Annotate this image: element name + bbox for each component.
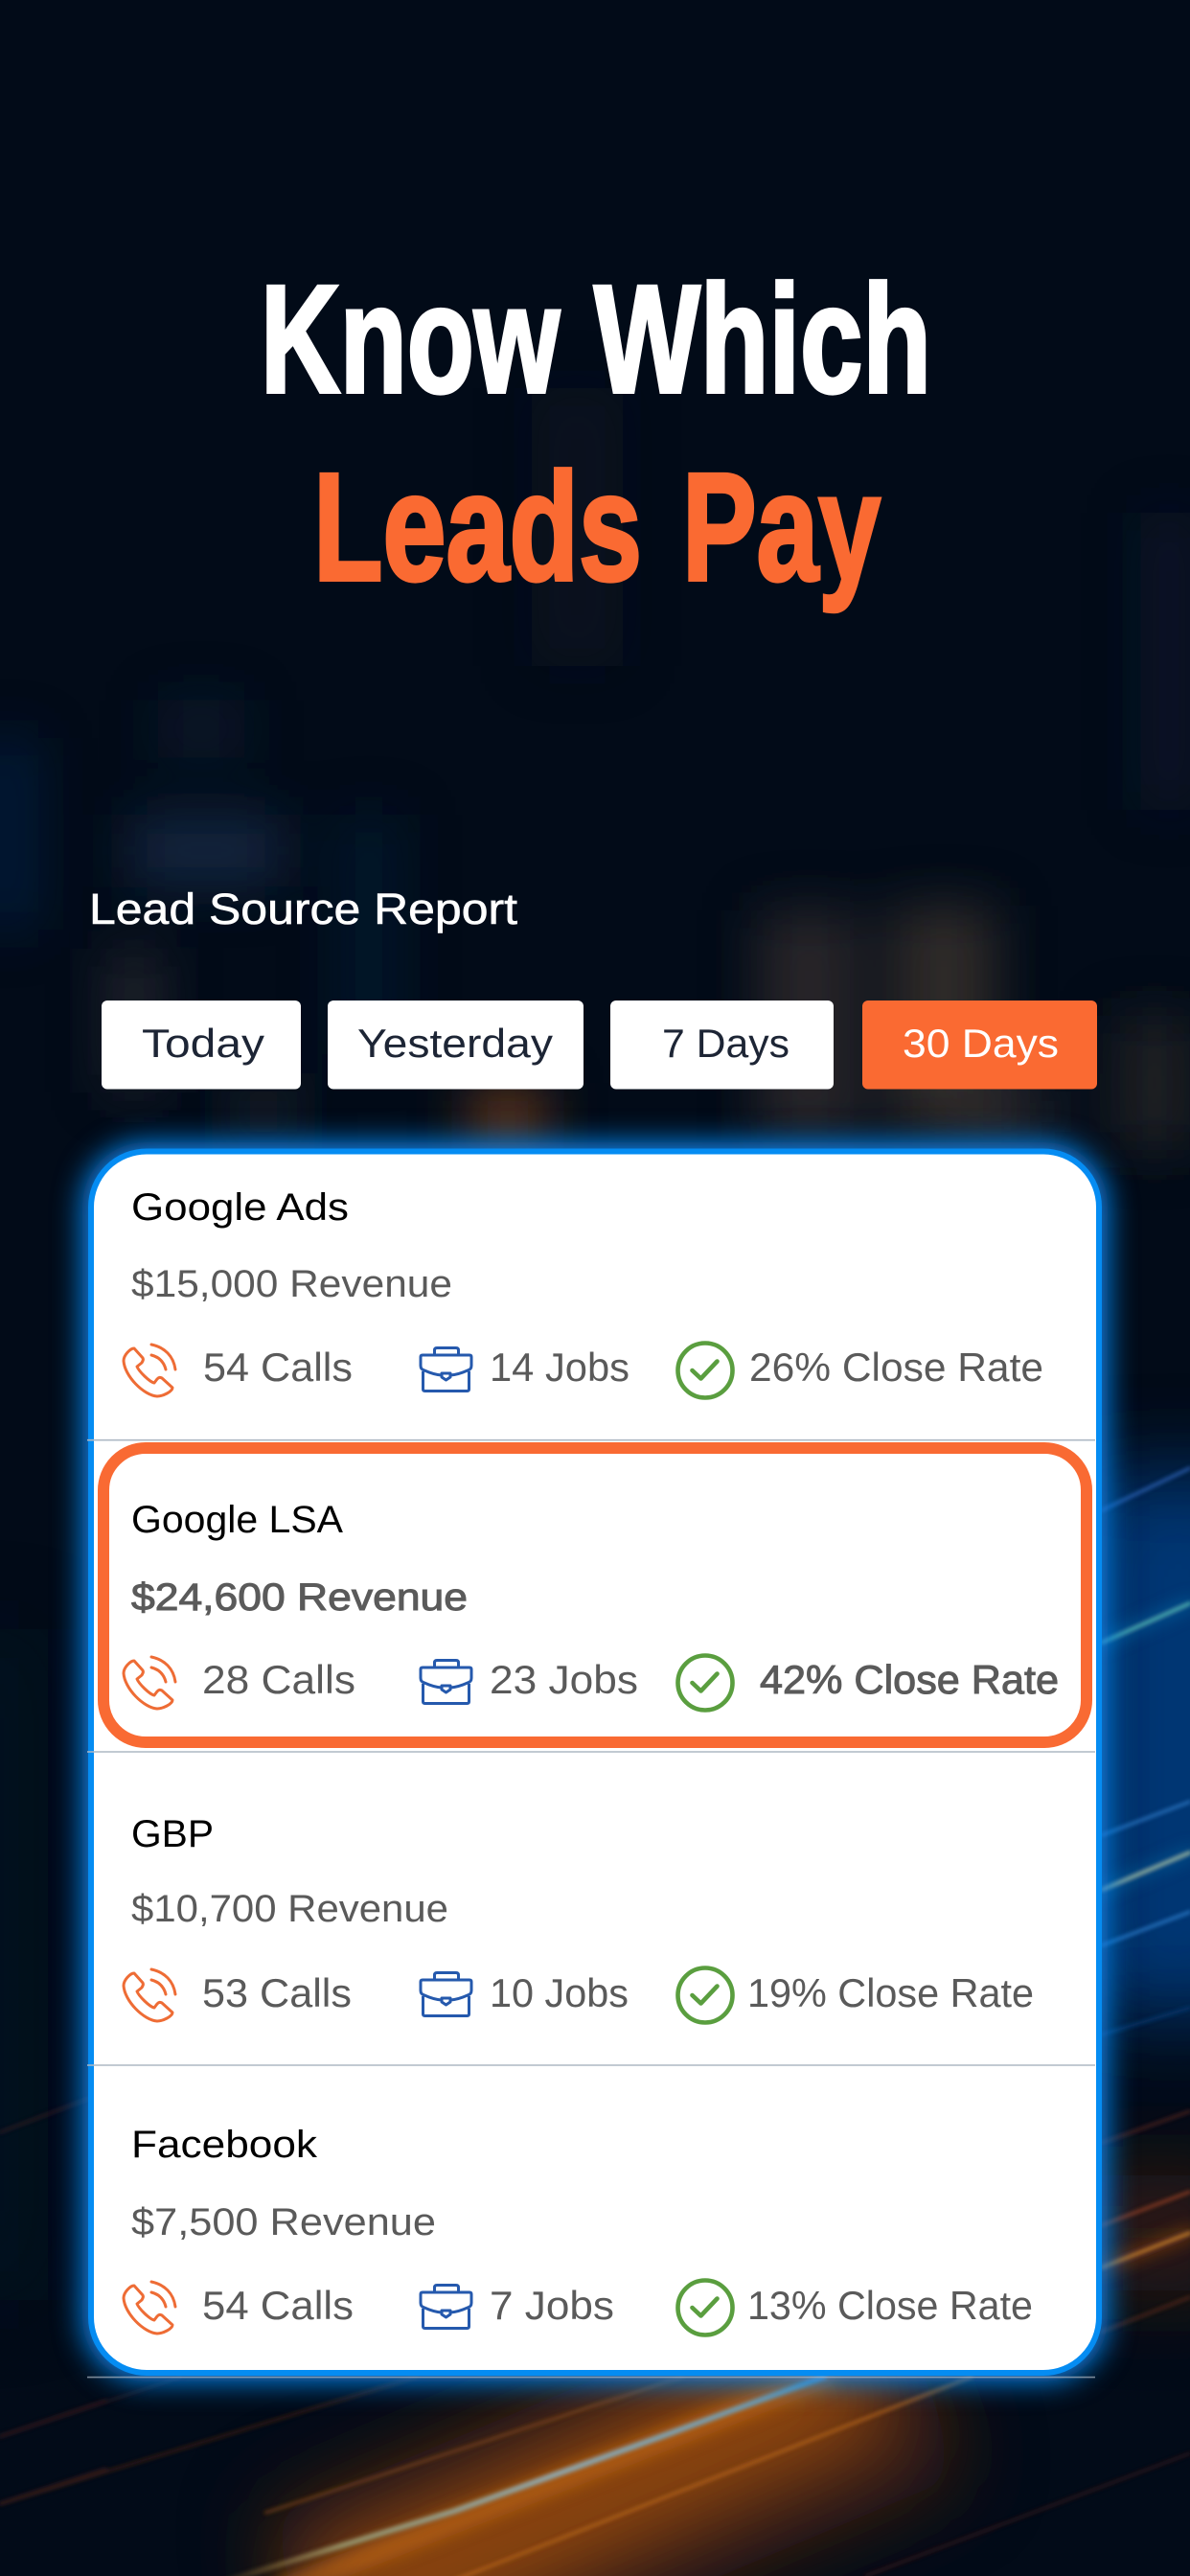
panel: glow behind report card [82, 1142, 1108, 2381]
row: GBP: 19% Close Rate [747, 1970, 1034, 2015]
row: Google Ads: 54 Calls [203, 1345, 353, 1390]
icon: phone [124, 1969, 175, 2021]
tab: 30 Days (active): 30 Days [903, 1021, 1059, 1066]
row: Facebook: 7 Jobs [490, 2283, 614, 2328]
title: Know [261, 253, 560, 425]
icon: briefcase [421, 2285, 471, 2329]
row: Facebook: Facebook [131, 2124, 318, 2166]
row: Facebook: 54 Calls [202, 2283, 354, 2328]
row: Facebook [124, 2124, 1033, 2334]
icon: check circle [678, 2281, 732, 2334]
row: Google LSA [124, 1499, 1059, 1710]
row: Google LSA: $24,600 Revenue [131, 1576, 468, 1619]
row: GBP [124, 1813, 1034, 2022]
title: Which [594, 253, 931, 425]
row: Facebook: 13% Close Rate [747, 2283, 1033, 2328]
tab: 30 Days (active) [862, 1000, 1097, 1089]
title: Pay [682, 441, 881, 612]
tab: Today: Today [142, 1021, 264, 1066]
icon: phone [124, 2282, 175, 2334]
title: Leads [313, 441, 642, 612]
row: Google Ads: 14 Jobs [490, 1345, 629, 1390]
row: Google LSA: Google LSA [131, 1499, 343, 1541]
icon: briefcase [421, 1972, 471, 2016]
row: Google LSA: 23 Jobs [490, 1657, 638, 1702]
row: Facebook: $7,500 Revenue [131, 2201, 436, 2243]
icon: briefcase [421, 1660, 471, 1704]
icon: phone [124, 1345, 175, 1396]
icon: check circle [678, 1344, 732, 1397]
row: Google Ads: Google Ads [131, 1186, 349, 1229]
tab: Today [102, 1000, 301, 1089]
tab: 7 Days [610, 1000, 834, 1089]
row: GBP: 53 Calls [202, 1970, 352, 2015]
tab: Yesterday [328, 1000, 584, 1089]
icon: check circle [678, 1968, 732, 2022]
row: Google Ads: $15,000 Revenue [131, 1263, 452, 1305]
row: GBP: 10 Jobs [490, 1970, 629, 2015]
row: Google LSA: 28 Calls [202, 1657, 355, 1702]
row highlight: Google LSA [103, 1448, 1087, 1742]
tab: Yesterday: Yesterday [357, 1021, 553, 1066]
icon: briefcase [421, 1347, 471, 1392]
row: GBP: $10,700 Revenue [131, 1888, 448, 1930]
icon: check circle [678, 1656, 732, 1710]
row: Google Ads: 26% Close Rate [749, 1345, 1043, 1390]
panel: report card [91, 1152, 1099, 2373]
date range tabs [102, 1000, 1097, 1089]
tab: 7 Days: 7 Days [662, 1021, 790, 1066]
heading: Lead Source Report: Lead Source Report [89, 885, 518, 933]
row: GBP: GBP [131, 1813, 214, 1855]
row: Google LSA: 42% Close Rate [760, 1657, 1059, 1702]
title [261, 253, 931, 612]
icon: phone [124, 1657, 175, 1709]
row: Google Ads [124, 1186, 1043, 1397]
